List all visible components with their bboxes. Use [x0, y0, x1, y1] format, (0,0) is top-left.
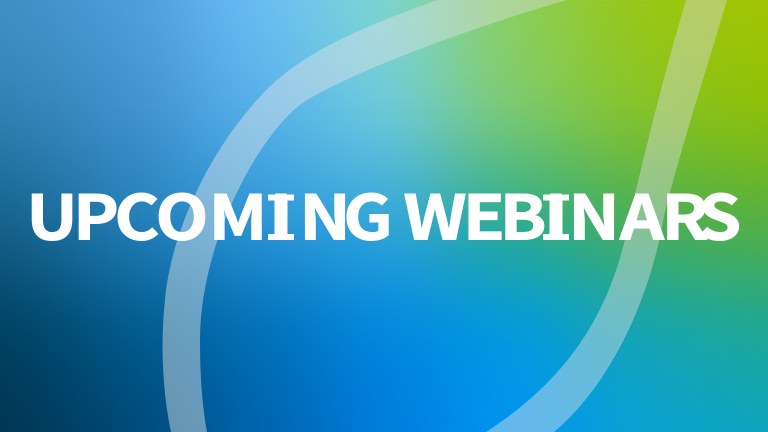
title word: upcoming: UPCOMING — [26, 168, 393, 257]
leaf outline ribbon — [163, 0, 727, 432]
ribbon: left and top arc — [163, 0, 567, 432]
title word: webinars: WEBINARS — [404, 168, 741, 257]
ribbon: right and bottom arc — [486, 0, 727, 432]
title — [26, 168, 741, 257]
